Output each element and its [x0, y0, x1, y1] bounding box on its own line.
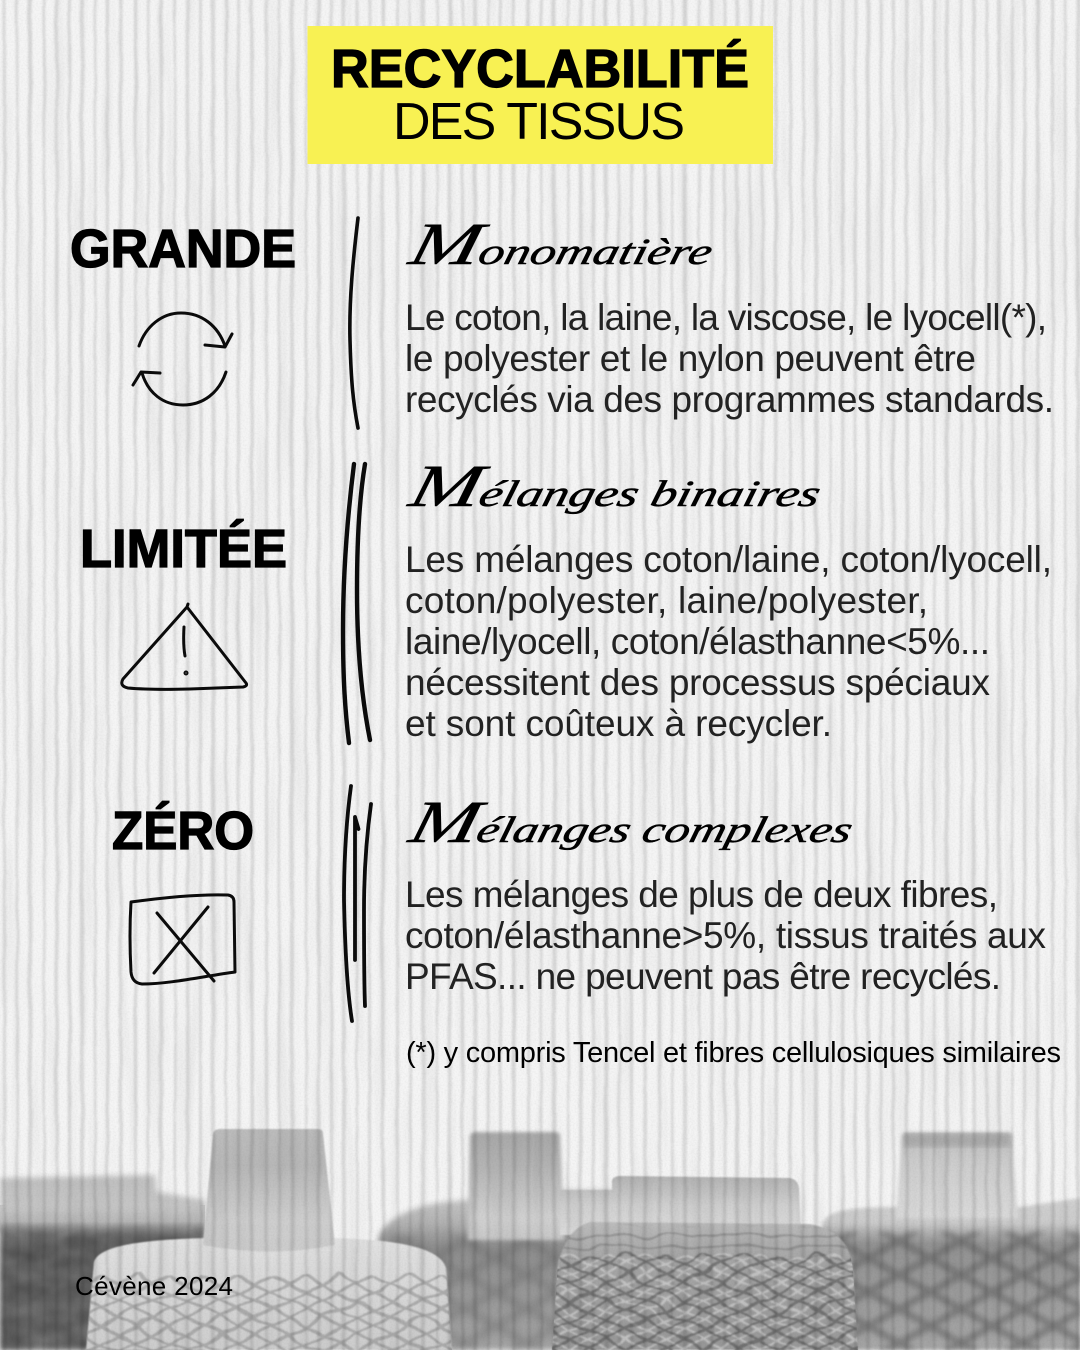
- section: recyclabilité zéro: [112, 786, 1046, 1021]
- spool: front centre, textured: [545, 1176, 865, 1350]
- icon: crossed box: [130, 895, 235, 984]
- text block: mélanges complexes: PFAS... ne peuvent pas être recyclés.: [405, 956, 1001, 997]
- text block: mélanges complexes: [405, 874, 1046, 997]
- text block: mélanges binaires: et sont coûteux à recycler.: [405, 703, 832, 744]
- text block: mélanges binaires: [405, 539, 1052, 744]
- script heading: mélanges binaires: Mélanges binaires: [402, 454, 830, 520]
- text block: mélanges binaires: coton/polyester, laine/polyester,: [405, 580, 928, 621]
- title banner: [308, 26, 773, 164]
- text block: monomatière: [405, 297, 1054, 420]
- source credit: Cévène 2024: [75, 1271, 233, 1301]
- divider: one stroke: [350, 218, 358, 428]
- heading: limitée: LIMITÉE: [80, 519, 287, 579]
- script heading: mélanges complexes: Mélanges complexes: [402, 790, 862, 856]
- icon: recycling arrows: [133, 313, 232, 405]
- text block: mélanges complexes: Les mélanges de plus de deux fibres,: [405, 874, 998, 915]
- text block: monomatière: le polyester et le nylon peuvent être: [405, 338, 976, 379]
- text block: mélanges binaires: laine/lyocell, coton/élasthanne<5%...: [405, 621, 990, 662]
- divider: three strokes: [344, 786, 371, 1021]
- spool: front left, pale: [80, 1129, 460, 1350]
- title line 2: DES TISSUS: [393, 93, 685, 151]
- icon: warning triangle: [122, 604, 247, 689]
- heading: zéro: ZÉRO: [112, 801, 254, 861]
- section: recyclabilité limitée: [80, 454, 1052, 744]
- script heading: monomatière: Monomatière: [402, 212, 722, 278]
- footnote: (*) y compris Tencel et fibres cellulosiques similaires: [406, 1037, 1061, 1069]
- spool: back left: [0, 1175, 205, 1350]
- spool: back centre: [378, 1132, 620, 1350]
- text block: monomatière: Le coton, la laine, la viscose, le lyocell(*),: [405, 297, 1047, 338]
- heading: grande: GRANDE: [70, 219, 296, 279]
- text block: mélanges binaires: Les mélanges coton/laine, coton/lyocell,: [405, 539, 1052, 580]
- section: grande recyclabilité: [70, 212, 1054, 428]
- spool: back right: [822, 1132, 1080, 1350]
- photo: thread spools: [0, 1129, 1080, 1350]
- text block: mélanges binaires: nécessitent des processus spéciaux: [405, 662, 990, 703]
- divider: two strokes: [343, 464, 370, 743]
- title line 1: RECYCLABILITÉ: [331, 39, 749, 99]
- text block: monomatière: recyclés via des programmes standards.: [405, 379, 1054, 420]
- text block: mélanges complexes: coton/élasthanne>5%, tissus traités aux: [405, 915, 1046, 956]
